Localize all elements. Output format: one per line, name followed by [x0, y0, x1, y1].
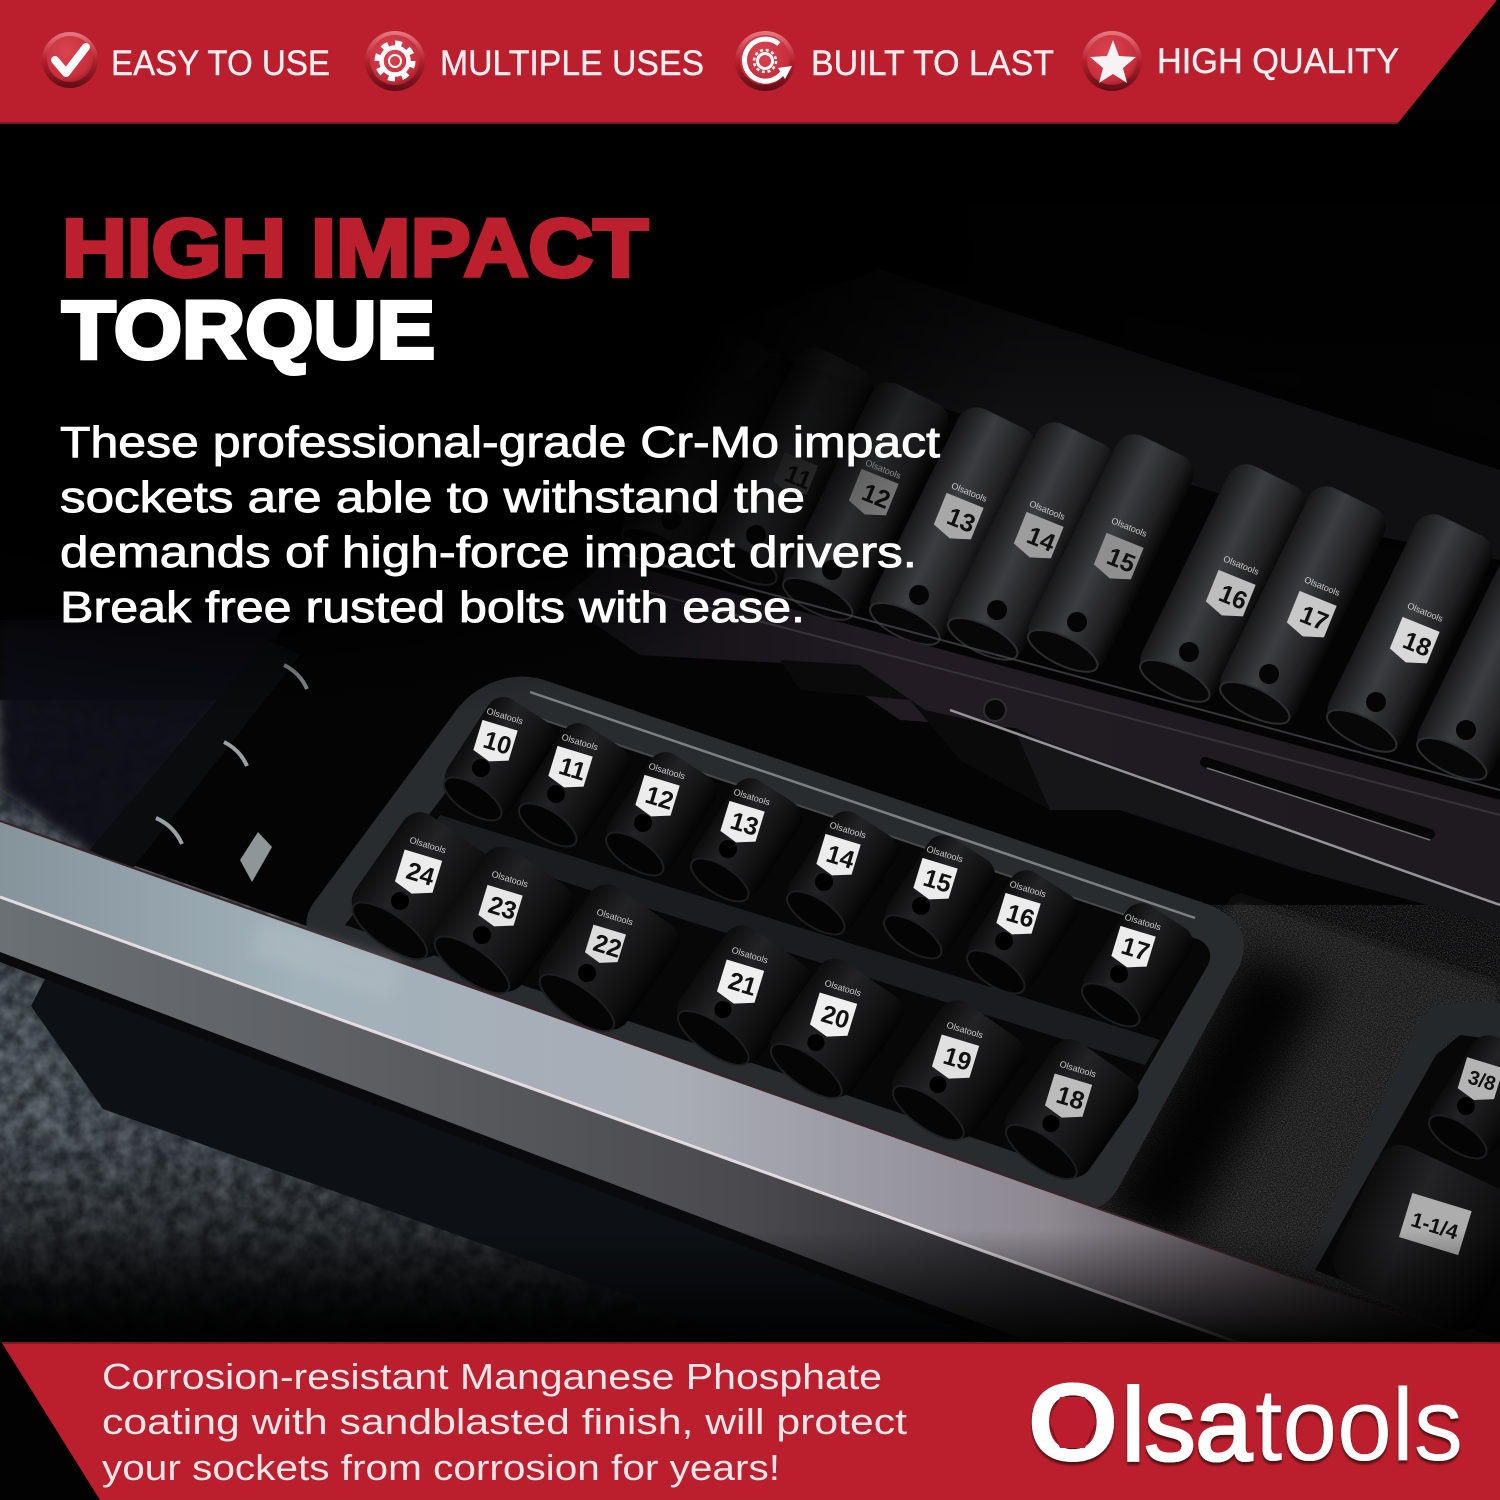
coating description	[102, 1356, 907, 1488]
short sockets bottom row	[338, 804, 1146, 1193]
socket 18 long	[1318, 508, 1499, 762]
socket 15: 15	[920, 864, 955, 899]
socket 12 long	[774, 376, 955, 630]
short sockets top row	[433, 690, 1200, 1037]
socket 11 long: 11	[780, 460, 816, 496]
socket 14 long	[939, 416, 1120, 670]
socket 13: 13	[727, 807, 762, 842]
icon: check mark	[42, 32, 98, 88]
drawer wall	[90, 640, 300, 872]
socket 23	[420, 838, 582, 1008]
socket 3/8	[1418, 1028, 1500, 1169]
socket 18	[992, 1032, 1146, 1193]
heading line: high impact: HIGH IMPACT	[62, 203, 648, 294]
lid rim band	[560, 555, 1500, 925]
socket 18: 18	[1053, 1081, 1088, 1116]
socket 11 long	[698, 341, 879, 595]
body paragraph: These professional-grade Cr-Mo impact	[60, 418, 940, 467]
socket 12: 12	[642, 781, 677, 816]
socket 15	[873, 828, 1002, 969]
socket 19 long partial	[1408, 536, 1500, 790]
socket 24	[338, 804, 500, 974]
body paragraph: demands of high-force impact drivers.	[60, 528, 917, 577]
long sockets	[613, 326, 1500, 790]
socket 18: Olsatools	[1058, 1059, 1098, 1080]
feature: built to last	[735, 31, 1054, 91]
body paragraph: Break free rusted bolts with ease.	[60, 583, 805, 632]
socket 1-1/4	[1324, 1137, 1500, 1340]
label: high quality: HIGH QUALITY	[1157, 42, 1399, 81]
socket 17	[1071, 896, 1200, 1037]
socket 10 long	[613, 326, 794, 580]
socket 10: 10	[480, 726, 515, 761]
carpet floor	[0, 620, 800, 1350]
heading line: torque: TORQUE	[62, 285, 435, 376]
socket 13 long: Olsatools	[950, 481, 989, 504]
socket 16: Olsatools	[1008, 879, 1048, 900]
socket 16: 16	[1003, 899, 1038, 934]
label: easy to use: EASY TO USE	[111, 44, 330, 83]
socket 21: 21	[725, 967, 760, 1002]
socket 17 long	[1211, 480, 1392, 734]
drawer interior	[90, 560, 1500, 1345]
socket 13: Olsatools	[732, 787, 772, 808]
socket 12 long: Olsatools	[864, 458, 903, 481]
socket 18 long: Olsatools	[1406, 601, 1445, 624]
banner background	[0, 0, 1497, 123]
socket 19: 19	[940, 1042, 975, 1077]
socket 12 long: 12	[858, 478, 894, 515]
icon: gear	[365, 31, 425, 91]
coating description: your sockets from corrosion for years!	[102, 1447, 780, 1488]
logo: Olsatools: O	[1027, 1360, 1119, 1485]
tray rim	[306, 677, 1244, 1210]
upper tray interior	[610, 355, 1500, 800]
tray webbing	[425, 815, 1160, 1065]
feature: multiple uses	[365, 31, 704, 91]
socket 20: Olsatools	[823, 978, 863, 999]
socket 18 long: 18	[1399, 626, 1435, 663]
socket 16	[956, 863, 1085, 1004]
socket 14: Olsatools	[828, 820, 868, 841]
socket 17: Olsatools	[1123, 912, 1163, 933]
socket 12: Olsatools	[647, 761, 687, 782]
socket 11: 11	[556, 752, 589, 787]
socket 15: Olsatools	[925, 844, 965, 865]
logo: Olsatools	[1027, 1360, 1463, 1485]
socket 19: Olsatools	[945, 1020, 985, 1041]
socket 16 long	[1131, 458, 1312, 712]
top banner	[0, 0, 1497, 124]
silver rail	[0, 821, 1500, 1500]
socket 21: Olsatools	[730, 945, 770, 966]
socket 23: Olsatools	[490, 869, 530, 890]
feature: high quality	[1082, 31, 1399, 91]
socket 22: Olsatools	[595, 907, 635, 928]
banner background	[2, 1343, 1500, 1500]
socket 13	[680, 771, 809, 912]
socket 12	[595, 745, 724, 886]
darkening overlays	[0, 120, 1100, 740]
drawer front panel	[31, 960, 1100, 1350]
socket 10: Olsatools	[485, 706, 525, 727]
icon: star	[1082, 31, 1142, 91]
socket 14 long: Olsatools	[1028, 499, 1067, 522]
socket 15 long: 15	[1103, 542, 1139, 579]
logo: Olsatools: tools	[1255, 1367, 1463, 1482]
socket 13 long: 13	[943, 502, 979, 539]
socket 20: 20	[818, 1000, 853, 1035]
lower socket tray	[306, 677, 1244, 1210]
tray interior	[345, 708, 1210, 1172]
icon: cycle gear	[735, 31, 795, 91]
socket 14: 14	[823, 840, 858, 875]
socket 15 long	[1019, 428, 1200, 682]
socket 17: 17	[1118, 932, 1153, 967]
bottom fade	[0, 1230, 1500, 1345]
socket 11	[508, 716, 637, 857]
socket 11: Olsatools	[560, 732, 600, 753]
right imperial socket tray	[1300, 1002, 1500, 1340]
socket 24: Olsatools	[408, 835, 448, 856]
body paragraph	[60, 418, 940, 632]
foam floor	[1080, 895, 1500, 1345]
socket 10	[433, 690, 562, 831]
socket 24: 24	[403, 857, 438, 892]
socket 16 long: Olsatools	[1222, 554, 1261, 577]
socket 15 long: Olsatools	[1110, 516, 1149, 539]
label: built to last: BUILT TO LAST	[811, 44, 1054, 83]
socket 23: 23	[485, 891, 520, 926]
coating description: Corrosion-resistant Manganese Phosphate	[102, 1356, 882, 1397]
drawer metal clips	[156, 665, 307, 882]
heading	[62, 203, 648, 376]
socket 20	[757, 951, 911, 1112]
socket 3/8: 3/8	[1465, 1067, 1498, 1096]
lid slots	[1125, 315, 1500, 440]
body paragraph: sockets are able to withstand the	[60, 473, 805, 522]
feature: easy to use	[42, 32, 330, 88]
socket 1-1/4: 1-1/4	[1408, 1208, 1461, 1245]
socket 22: 22	[590, 929, 625, 964]
socket 14 long: 14	[1023, 521, 1059, 558]
socket 17 long: 17	[1296, 600, 1332, 637]
socket 22	[525, 876, 687, 1046]
coating description: coating with sandblasted finish, will protect	[102, 1401, 907, 1442]
socket 14	[776, 804, 905, 945]
bottom banner	[2, 1342, 1500, 1500]
socket 13 long	[861, 401, 1042, 655]
label: multiple uses: MULTIPLE USES	[440, 44, 704, 83]
socket 21	[664, 918, 818, 1079]
socket 19	[879, 993, 1033, 1154]
socket 17 long: Olsatools	[1303, 575, 1342, 598]
socket 16 long: 16	[1215, 579, 1251, 616]
upper lid surface	[710, 270, 1500, 560]
logo: Olsatools: lsa	[1122, 1367, 1253, 1482]
rim highlights	[530, 692, 1195, 918]
